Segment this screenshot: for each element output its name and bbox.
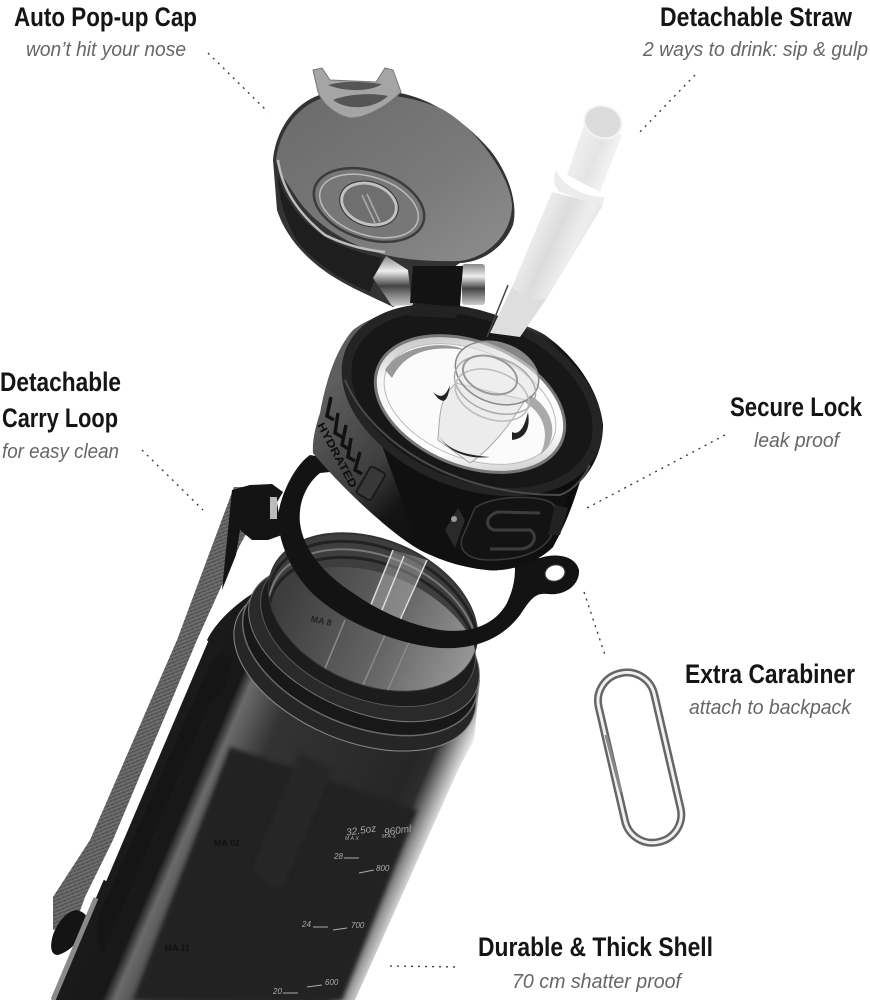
lid lip [313,68,401,118]
white gap highlight [104,640,206,880]
loop bracket [222,484,283,590]
mirrored 8 AM mark: 8 AM [310,614,333,628]
spout [433,330,548,463]
flip lid [273,68,514,318]
ml and oz scale: 600 [325,978,339,987]
ml and oz scale: 24 [301,920,311,929]
ml and oz scale: 10 AM [214,838,240,848]
callout: Detachable Straw [637,2,868,135]
callout: Secure Lock [587,392,863,508]
straw [487,100,626,337]
ml and oz scale: 960ml [384,824,413,838]
extra carabiner [592,667,687,848]
callout: Detachable Carry Loop [0,367,203,510]
bottle neck [233,532,480,752]
ml and oz scale [164,824,413,996]
ml and oz scale: 32.5oz [346,824,377,839]
carry loop ring [222,455,579,648]
lid inner seal ring [304,155,434,255]
callout: Durable & Thick Shell: 70 cm shatter proof [512,971,683,993]
straw in bottle [370,550,427,620]
callout: Auto Pop-up Cap [14,2,268,112]
dark inner strip [97,654,232,953]
grip end slot [356,466,386,501]
ring tab hole [543,563,567,583]
callout: Detachable Straw: 2 ways to drink: sip & gulp [642,39,868,61]
drinking cap base [313,267,631,570]
ml and oz scale: 700 [351,921,365,930]
lid inner face [276,93,512,261]
ml and oz scale: 20 [272,987,282,996]
cap top face [313,267,631,533]
callout: Durable & Thick Shell [390,932,713,993]
callout: Detachable Carry Loop: Detachable [0,367,121,397]
lock button [445,497,568,560]
ml and oz scale: MAX [382,834,397,840]
lid outer shell [273,89,514,307]
ml and oz scale: 800 [376,864,390,873]
brand text: HYDRATED [314,421,359,490]
strap end [51,910,87,955]
dark core of the bottle [133,747,417,1000]
callout: Extra Carabiner: attach to backpack [689,697,852,719]
bottle left edge [53,898,96,1000]
lid dark wall [278,175,382,292]
ml and oz scale: 28 [333,852,343,861]
callout: Detachable Carry Loop: Carry Loop [2,403,118,433]
ml and oz scale: MAX [345,836,360,842]
callout: Extra Carabiner [584,592,855,719]
inner wall [272,567,476,691]
bottle opening [268,532,478,692]
inner printed column [253,753,333,887]
grip ribs [327,397,362,474]
bottle body [52,590,480,1000]
hinge [373,256,485,318]
carry loop strap [51,487,272,955]
callout: Auto Pop-up Cap: won’t hit your nose [26,39,186,61]
clear window [355,309,585,499]
threads [269,540,476,628]
illustration: exploded water bottle [51,68,687,1000]
callout: Auto Pop-up Cap: Auto Pop-up Cap [14,2,197,32]
ml and oz scale: 11 AM [164,943,190,953]
callout: Secure Lock: leak proof [754,430,841,452]
callout: Durable & Thick Shell: Durable & Thick Shell [478,932,713,962]
callout: Detachable Carry Loop: for easy clean [2,441,119,463]
